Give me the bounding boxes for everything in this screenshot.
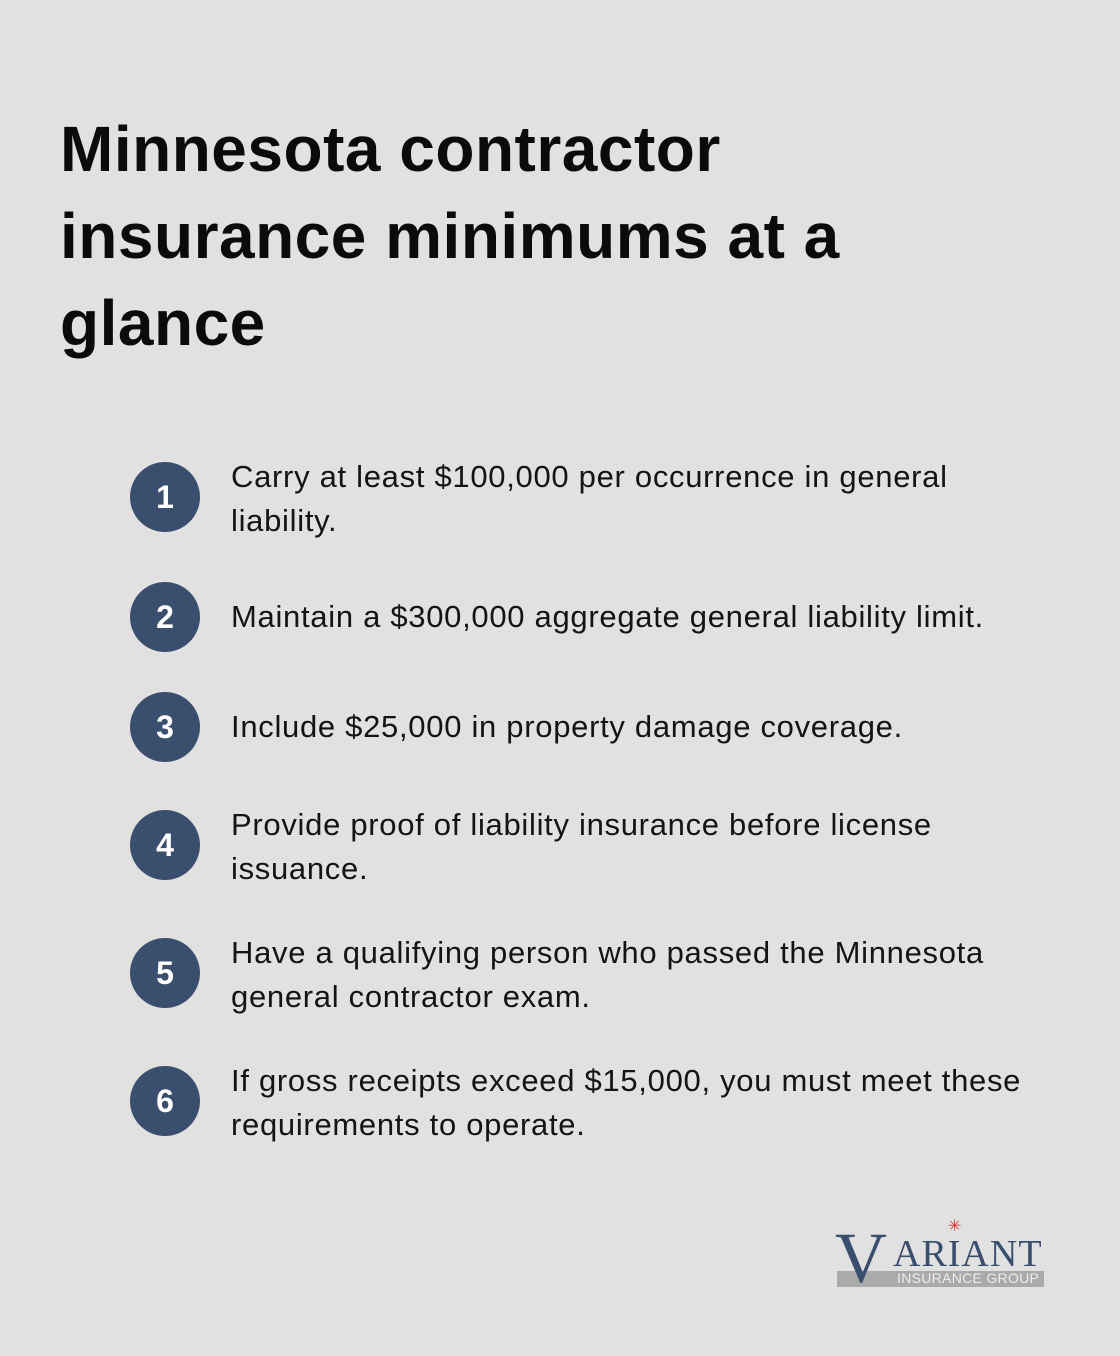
item 6: 6 [156, 1083, 174, 1119]
logo [835, 1218, 1044, 1298]
title: Minnesota contractor [60, 113, 721, 185]
logo: INSURANCE GROUP [897, 1270, 1039, 1286]
logo: ✳ [948, 1218, 961, 1235]
title: glance [60, 287, 266, 359]
title: insurance minimums at a [60, 200, 840, 272]
item 5: 5 [156, 955, 174, 991]
item 6: If gross receipts exceed $15,000, you must meet these [231, 1063, 1021, 1098]
item 2: 2 [156, 599, 174, 635]
item 1 [130, 459, 948, 538]
item 5 [130, 935, 984, 1014]
item 4: issuance. [231, 851, 368, 886]
item 1: Carry at least $100,000 per occurrence in general [231, 459, 948, 494]
title [60, 113, 840, 359]
item 4 [130, 807, 932, 886]
item 2: Maintain a $300,000 aggregate general liability limit. [231, 599, 984, 634]
logo: ARIANT [893, 1233, 1043, 1275]
item 5: Have a qualifying person who passed the Minnesota [231, 935, 984, 970]
item 6 [130, 1063, 1021, 1142]
logo: V [835, 1218, 887, 1298]
item 2 [130, 582, 984, 652]
item 1: 1 [156, 479, 174, 515]
item 1: liability. [231, 503, 337, 538]
item 5: general contractor exam. [231, 979, 591, 1014]
item 3: 3 [156, 709, 174, 745]
item 3 [130, 692, 903, 762]
item 4: 4 [156, 827, 174, 863]
item 4: Provide proof of liability insurance before license [231, 807, 932, 842]
item 3: Include $25,000 in property damage coverage. [231, 709, 903, 744]
item 6: requirements to operate. [231, 1107, 586, 1142]
